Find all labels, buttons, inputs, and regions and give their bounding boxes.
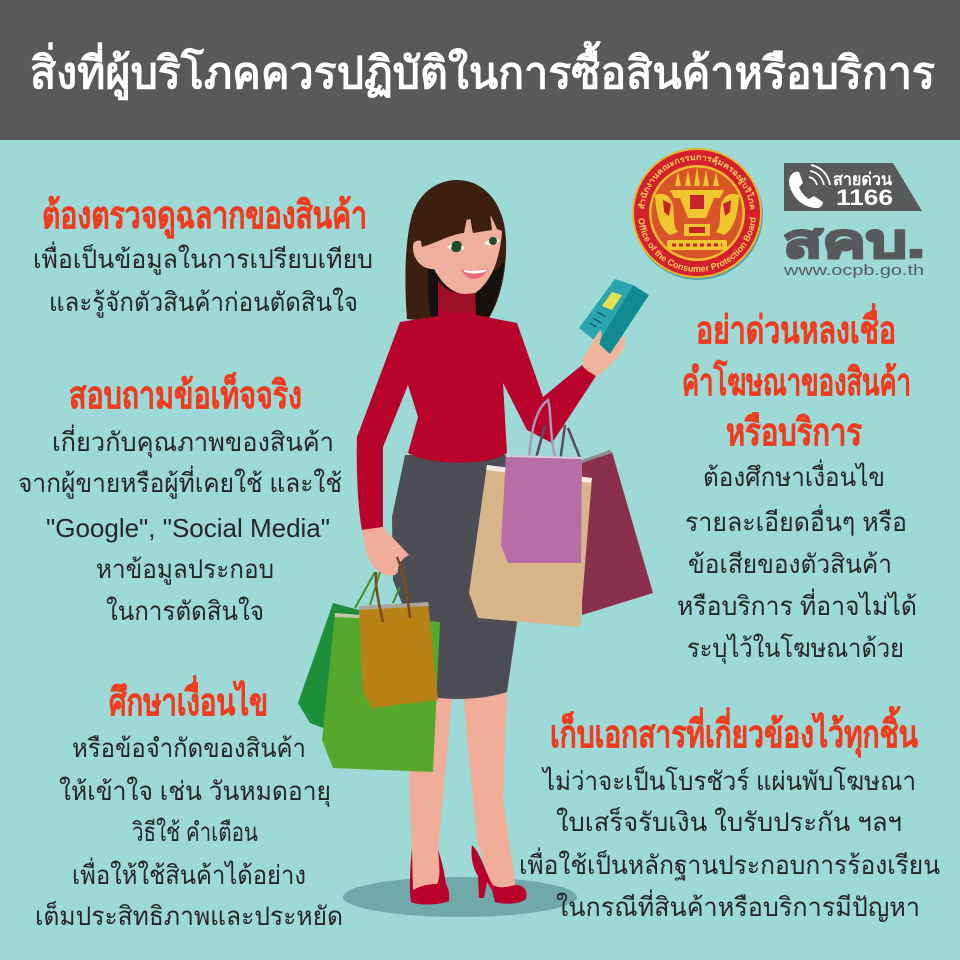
section: study conditions: วิธีใช้ คำเตือน bbox=[132, 817, 258, 847]
green bag handles bbox=[355, 572, 400, 608]
section: do not believe ads: อย่าด่วนหลงเชื่อ bbox=[696, 303, 896, 352]
section: study conditions: หรือข้อจำกัดของสินค้า bbox=[72, 733, 306, 763]
section: keep documents: ในกรณีที่สินค้าหรือบริการมีปัญหา bbox=[556, 889, 920, 922]
sweater bbox=[357, 280, 596, 530]
brown bag handle bbox=[376, 557, 410, 622]
section: ask for facts: ในการตัดสินใจ bbox=[106, 596, 264, 626]
section: check product label bbox=[33, 195, 373, 318]
brown bag bbox=[359, 602, 438, 708]
section: keep documents: ใบเสร็จรับเงิน ใบรับประกัน ฯลฯ bbox=[556, 806, 902, 837]
section: study conditions: ให้เข้าใจ เช่น วันหมดอายุ bbox=[59, 776, 331, 807]
bangs bbox=[420, 194, 505, 247]
hair bbox=[405, 180, 506, 322]
ground shadow bbox=[343, 877, 577, 917]
hotline badge bbox=[784, 163, 922, 211]
section: ask for facts: เกี่ยวกับคุณภาพของสินค้า bbox=[52, 424, 334, 458]
section: do not believe ads: หรือบริการ ที่อาจไม่ได้ bbox=[677, 588, 917, 621]
agency wordmark and website: www.ocpb.go.th bbox=[783, 262, 924, 279]
section: ask for facts: "Google", "Social Media" bbox=[46, 513, 330, 543]
neck and face bbox=[413, 215, 502, 295]
header banner: สิ่งที่ผู้บริโภคควรปฏิบัติในการซื้อสินค้าหรือบริการ bbox=[30, 40, 935, 100]
section: keep documents: ไม่ว่าจะเป็นโบรชัวร์ แผ่นพับโฆษณา bbox=[541, 765, 916, 796]
section: ask for facts bbox=[18, 372, 342, 626]
dark green bag bbox=[298, 603, 360, 728]
icon: telephone with signal arcs bbox=[789, 165, 830, 208]
section: keep documents bbox=[519, 706, 940, 922]
section: keep documents: เพื่อใช้เป็นหลักฐานประกอบการร้องเรียน bbox=[519, 847, 940, 881]
section: study conditions: เพื่อให้ใช้สินค้าได้อย่าง bbox=[72, 857, 306, 890]
section: do not believe ads bbox=[677, 303, 917, 664]
section: do not believe ads: ระบุไว้ในโฆษณาด้วย bbox=[687, 633, 904, 664]
hotline badge: สายด่วน bbox=[833, 170, 892, 189]
icon: consumer protection board seal: Office of the Consumer Protection Board bbox=[638, 217, 756, 272]
agency wordmark and website bbox=[783, 215, 925, 279]
section: study conditions: เต็มประสิทธิภาพและประหยัด bbox=[35, 900, 343, 931]
section: check product label: ต้องตรวจดูฉลากของสินค้า bbox=[42, 195, 367, 239]
right hand bbox=[582, 337, 625, 376]
eyes bbox=[447, 239, 500, 251]
section: do not believe ads: รายละเอียดอื่นๆ หรือ bbox=[685, 504, 907, 537]
thumb bbox=[584, 330, 602, 358]
section: ask for facts: สอบถามข้อเท็จจริง bbox=[69, 372, 302, 417]
maroon bag bbox=[582, 450, 653, 615]
hotline badge: 1166 bbox=[836, 185, 893, 210]
section: ask for facts: จากผู้ขายหรือผู้ที่เคยใช้ และใช้ bbox=[18, 465, 342, 499]
section: do not believe ads: ต้องศึกษาเงื่อนไข bbox=[703, 459, 885, 492]
illustration: woman with shopping bags bbox=[298, 180, 653, 905]
agency wordmark and website: สคบ. bbox=[783, 215, 925, 267]
section: check product label: และรู้จักตัวสินค้าก่อนตัดสินใจ bbox=[49, 287, 358, 318]
product box bbox=[579, 279, 649, 354]
section: do not believe ads: หรือบริการ bbox=[726, 412, 862, 454]
legs bbox=[409, 698, 452, 895]
icon: consumer protection board seal bbox=[632, 148, 763, 280]
section: do not believe ads: ข้อเสียของตัวสินค้า bbox=[688, 549, 892, 579]
section: study conditions: ศึกษาเงื่อนไข bbox=[109, 675, 268, 724]
icon: consumer protection board seal: สำนักงานคณะกรรมการคุ้มครองผู้บริโภค bbox=[638, 155, 755, 210]
mouth bbox=[461, 268, 488, 279]
header banner bbox=[0, 0, 960, 140]
section: study conditions bbox=[35, 675, 343, 931]
section: check product label: เพื่อเป็นข้อมูลในการเปรียบเทียบ bbox=[33, 241, 373, 275]
purple bag handles bbox=[529, 400, 580, 470]
tan bag bbox=[469, 465, 592, 627]
purple bag bbox=[501, 455, 582, 563]
skirt bbox=[392, 455, 517, 699]
shoes bbox=[410, 848, 449, 905]
green bag bbox=[322, 613, 440, 772]
section: ask for facts: หาข้อมูลประกอบ bbox=[96, 554, 274, 585]
left hand bbox=[362, 527, 409, 576]
